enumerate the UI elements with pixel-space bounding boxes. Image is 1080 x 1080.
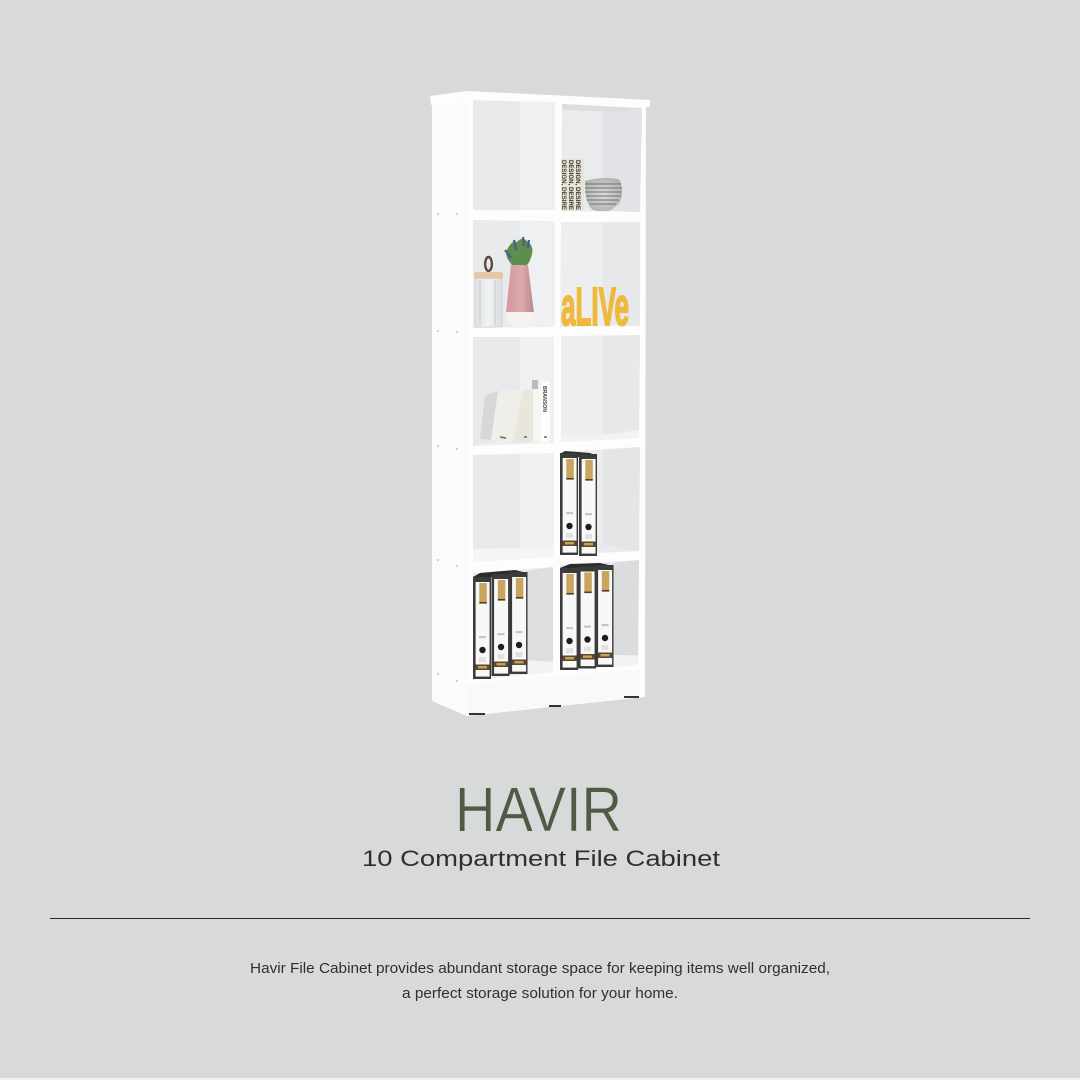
illustration: white ten-compartment cabinet: [430, 91, 650, 716]
books: design desire: DESIGN, DESIRE: [560, 160, 567, 211]
title: HAVIR: [455, 775, 622, 845]
compartment row 5: [473, 560, 639, 680]
description text: Havir File Cabinet provides abundant storage space for keeping items well organized,: [250, 960, 830, 977]
binders: bottom left shelf: [473, 570, 528, 679]
compartment row 4: [473, 447, 640, 562]
subtitle: 10 Compartment File Cabinet: [362, 846, 721, 871]
description text: [250, 960, 830, 1002]
compartment row 3: [473, 335, 640, 446]
books: design desire: DESIGN, DESIRE: [567, 160, 574, 211]
binders: middle shelf: [560, 451, 597, 556]
description text: a perfect storage solution for your home.: [402, 985, 678, 1002]
divider line: [50, 918, 1030, 919]
vase with plant: [505, 237, 534, 327]
compartment row 1: [473, 100, 642, 212]
standing books: BRANSON: [541, 386, 547, 412]
illustration: white ten-compartment cabinet: aLIVe: [561, 277, 629, 337]
binders: bottom right shelf: [560, 563, 614, 670]
striped bowl: [585, 178, 622, 211]
cabinet screws: [437, 213, 458, 682]
cabinet body: [430, 91, 650, 716]
books: design desire: DESIGN, DESIRE: [574, 160, 581, 211]
books: design desire: [560, 159, 584, 211]
standing books: [480, 380, 550, 443]
glass jar: [474, 257, 503, 327]
compartment row 2: [473, 220, 640, 328]
